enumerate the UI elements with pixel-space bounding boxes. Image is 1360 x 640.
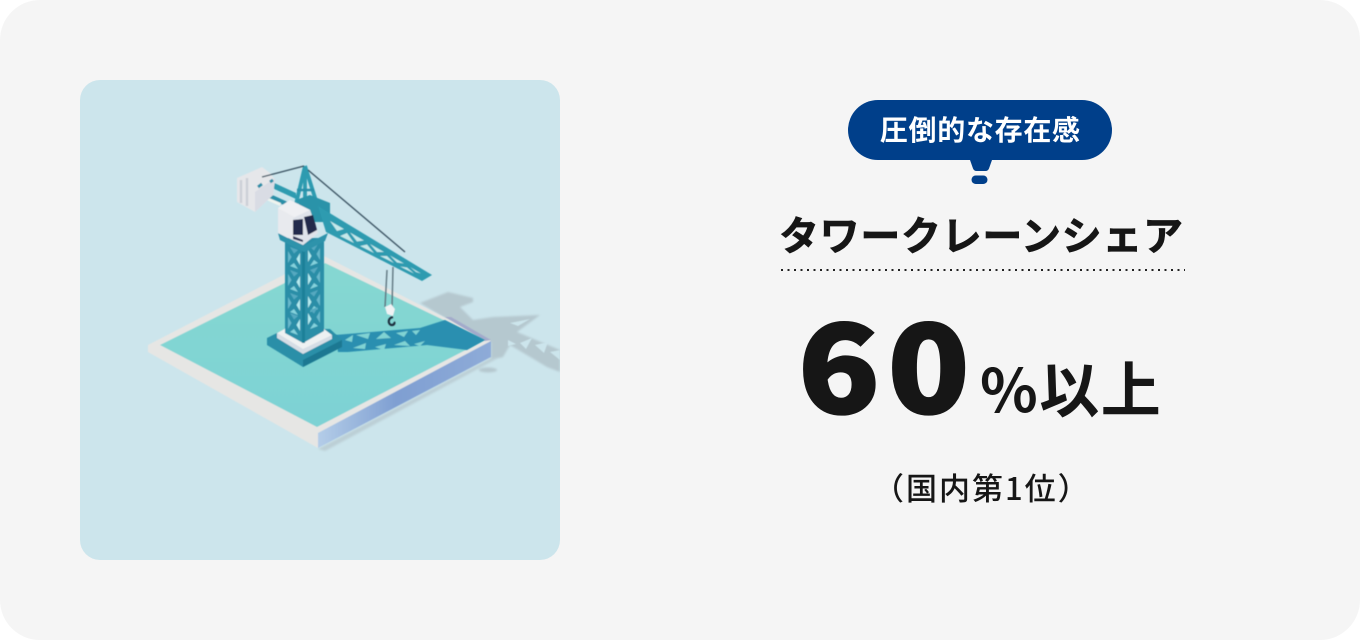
crane [237, 166, 432, 367]
jib [322, 212, 432, 282]
crane shadow on platform [335, 320, 485, 352]
big figure: %以上 [980, 343, 1162, 430]
shadow lattice gaps [508, 319, 560, 360]
hook [385, 267, 395, 325]
badge: speech bubble: 圧倒的な存在感 [880, 109, 1081, 149]
site platform [148, 255, 491, 448]
illustration panel: tower crane on a site [80, 80, 560, 560]
counterweight arm [268, 182, 297, 206]
crane base [267, 326, 342, 367]
tower mast [285, 238, 324, 343]
big figure: 60 [798, 274, 977, 448]
badge: speech bubble [848, 100, 1112, 184]
footnote: （国内第1位） [873, 464, 1091, 509]
operator cab [278, 200, 328, 252]
big figure [798, 274, 1162, 448]
dotted divider [781, 269, 1185, 271]
counterweight block [237, 167, 275, 212]
heading: タワークレーンシェア [779, 204, 1183, 262]
cast shadow on the ground [318, 292, 560, 451]
apex frame and tie cables [262, 166, 405, 252]
